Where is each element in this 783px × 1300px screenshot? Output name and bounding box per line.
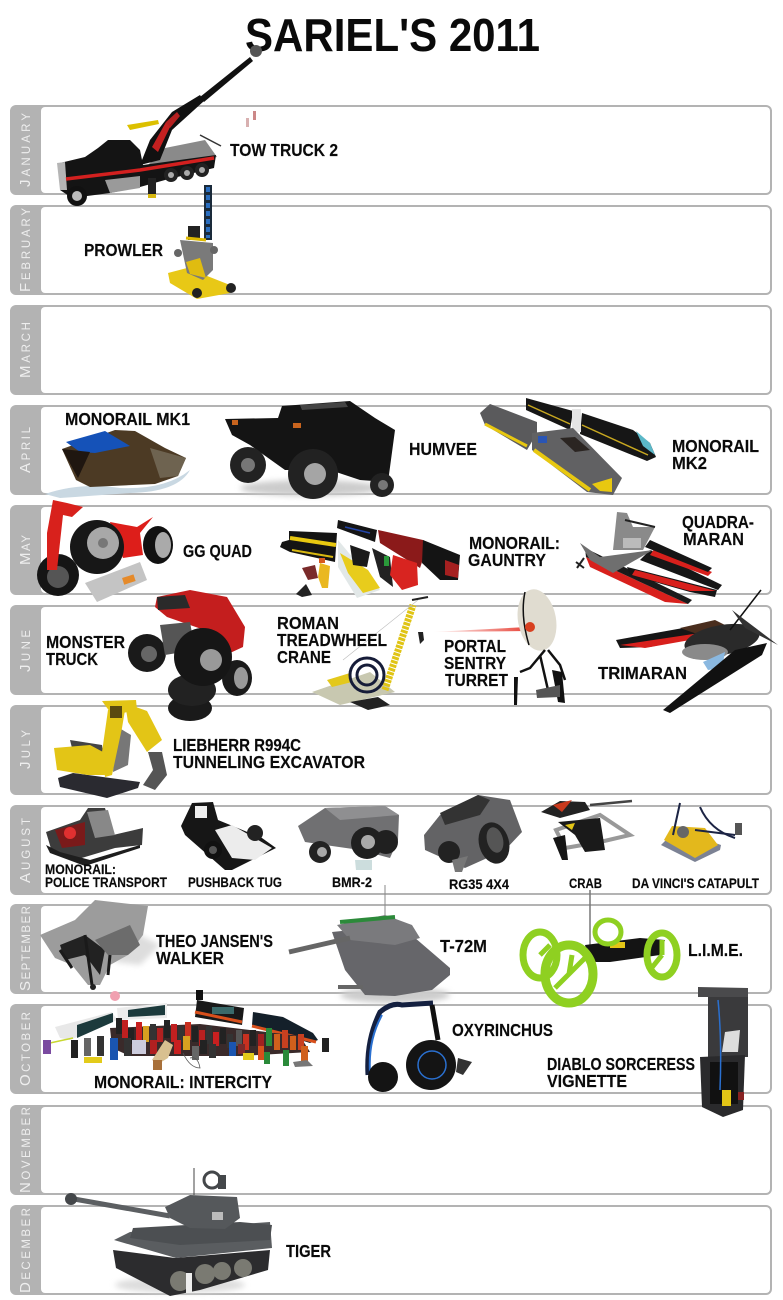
- panel: September: [10, 904, 772, 994]
- label: roman treadwheel crane line two: TREADWHEEL: [277, 630, 387, 650]
- icon: monster truck: [128, 590, 252, 721]
- label: portal sentry turret: PORTAL: [444, 636, 506, 656]
- icon: monorail mk2: [480, 398, 656, 495]
- panel: October: OCTOBER: [17, 1012, 34, 1086]
- panel: October: [10, 1004, 772, 1094]
- label: gg quad: GG QUAD: [183, 541, 252, 561]
- icon: portal sentry turret: [432, 586, 565, 705]
- icon: prowler: [168, 185, 236, 299]
- panel: January: JANUARY: [17, 113, 34, 187]
- panel: February: [10, 205, 772, 295]
- label: diablo sorceress vignette line two: VIGNETTE: [547, 1071, 627, 1091]
- label: pushback tug: PUSHBACK TUG: [188, 875, 282, 890]
- panel: January: [10, 105, 772, 195]
- label: da vinci's catapult: DA VINCI'S CATAPULT: [632, 876, 759, 891]
- icon: rg35 4x4: [424, 795, 522, 872]
- panel: June: JUNE: [17, 630, 34, 672]
- label: tow truck 2: TOW TRUCK 2: [230, 140, 338, 160]
- panel: June: [10, 605, 772, 695]
- crowd of minifigures: [71, 1018, 329, 1066]
- icon: humvee: [225, 401, 395, 499]
- label: monorail police transport line two: POLICE TRANSPORT: [45, 875, 167, 890]
- icon: liebherr excavator: [54, 700, 167, 798]
- icon: quadramaran: [576, 512, 722, 604]
- icon: tiger: [65, 1168, 272, 1296]
- icon: bmr-2: [298, 806, 399, 870]
- icon: pushback tug: [181, 802, 276, 870]
- label: l.i.m.e.: L.I.M.E.: [688, 940, 743, 960]
- label: bmr-2: BMR-2: [332, 875, 372, 890]
- icon: da vinci's catapult: [661, 803, 742, 862]
- label: liebherr excavator: LIEBHERR R994C: [173, 735, 301, 755]
- label: monster truck line two: TRUCK: [46, 649, 98, 669]
- icon: diablo sorceress vignette: [698, 987, 748, 1117]
- panel: April: APRIL: [17, 426, 34, 473]
- label: tiger: TIGER: [286, 1241, 331, 1261]
- label: t-72m: T-72M: [440, 936, 487, 956]
- label: monorail police transport: MONORAIL:: [45, 862, 116, 877]
- panel: March: MARCH: [17, 322, 34, 378]
- label: monorail gauntry: MONORAIL:: [469, 533, 560, 553]
- label: monorail mk1: MONORAIL MK1: [65, 409, 190, 429]
- label: rg35 4x4: RG35 4X4: [449, 877, 509, 892]
- panel: July: JULY: [17, 730, 34, 769]
- label: quadramaran line two: MARAN: [683, 529, 744, 549]
- icon: trimaran: [616, 590, 778, 713]
- label: portal sentry turret line three: TURRET: [445, 670, 508, 690]
- icon: gg quad: [37, 500, 173, 602]
- label: humvee: HUMVEE: [409, 439, 477, 459]
- icon: monorail police transport: [46, 808, 143, 866]
- icon: theo jansen's walker: [40, 900, 160, 1001]
- panel: November: NOVEMBER: [17, 1107, 34, 1193]
- panel: December: DECEMBER: [17, 1208, 34, 1293]
- icon: monorail intercity: [43, 990, 329, 1070]
- icon: oxyrinchus: [368, 1003, 472, 1092]
- icon: crab: [541, 800, 632, 860]
- label: monorail mk2 line two: MK2: [672, 453, 707, 473]
- title: SARIEL'S 2011: [245, 9, 540, 61]
- panel: September: SEPTEMBER: [17, 906, 34, 991]
- panel: November: [10, 1105, 772, 1195]
- label: monorail gauntry line two: GAUNTRY: [468, 550, 546, 570]
- label: roman treadwheel crane: ROMAN: [277, 613, 339, 633]
- label: roman treadwheel crane line three: CRANE: [277, 647, 331, 667]
- label: prowler: PROWLER: [84, 240, 163, 260]
- label: diablo sorceress vignette: DIABLO SORCERESS: [547, 1054, 695, 1074]
- panel: February: FEBRUARY: [17, 208, 34, 292]
- label: crab: CRAB: [569, 876, 602, 891]
- label: oxyrinchus: OXYRINCHUS: [452, 1020, 553, 1040]
- label: theo jansen's walker line two: WALKER: [156, 948, 224, 968]
- label: monorail intercity: MONORAIL: INTERCITY: [94, 1072, 272, 1092]
- icon: monorail mk1: [45, 430, 190, 498]
- icon: tow truck 2: [57, 45, 262, 206]
- label: portal sentry turret line two: SENTRY: [444, 653, 506, 673]
- panel: May: MAY: [17, 535, 34, 565]
- icon: t-72m: [289, 885, 450, 1003]
- label: monorail mk2: MONORAIL: [672, 436, 759, 456]
- label: quadramaran: QUADRA-: [682, 512, 754, 532]
- panel: December: [10, 1205, 772, 1295]
- icon: l.i.m.e.: [523, 890, 677, 1003]
- panel: August: AUGUST: [17, 818, 34, 883]
- label: liebherr excavator line two: TUNNELING EXCAVATOR: [173, 752, 365, 772]
- panel: May: [10, 505, 772, 595]
- panel: April: [10, 405, 772, 495]
- icon: roman treadwheel crane: [312, 597, 428, 710]
- label: trimaran: TRIMARAN: [598, 663, 687, 683]
- panel: August: [10, 805, 772, 895]
- label: monster truck: MONSTER: [46, 632, 125, 652]
- panel: March: [10, 305, 772, 395]
- icon: monorail gauntry: [280, 520, 460, 598]
- label: theo jansen's walker: THEO JANSEN'S: [156, 931, 273, 951]
- panel: July: [10, 705, 772, 795]
